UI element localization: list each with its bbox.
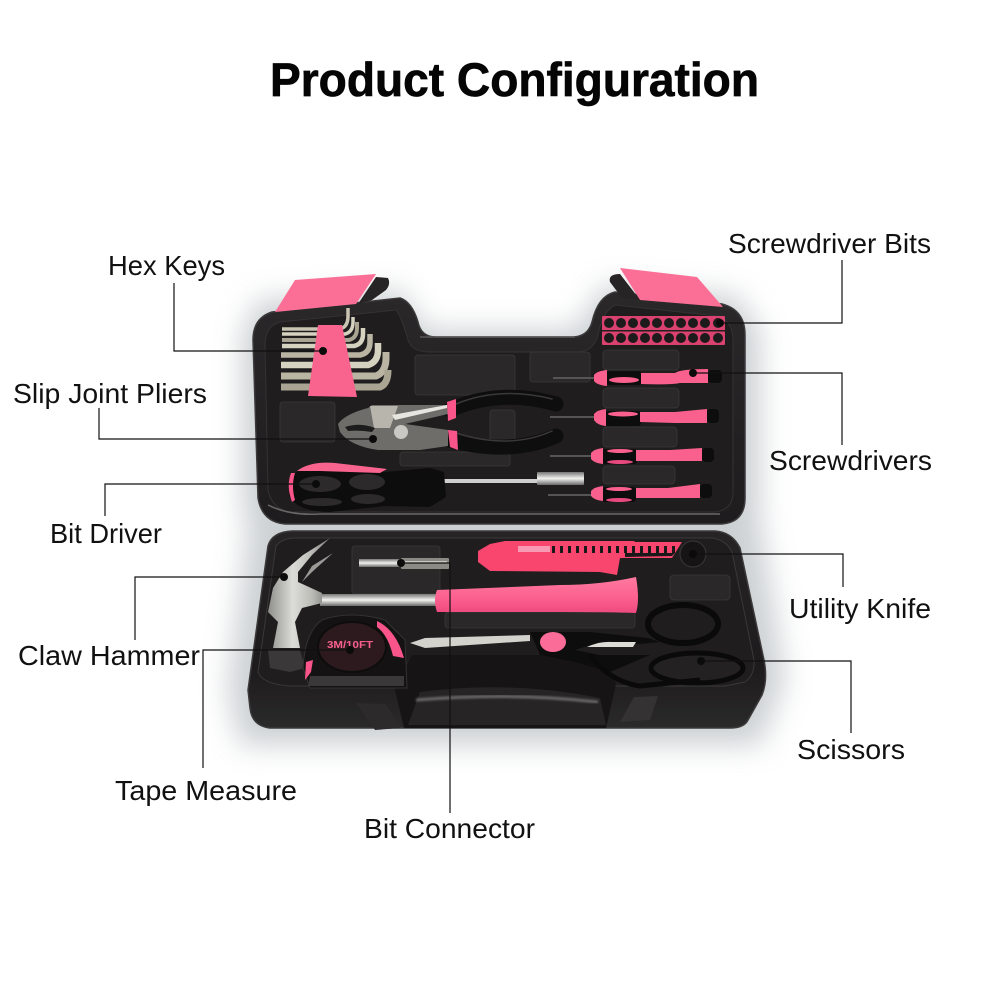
label: Claw Hammer: Claw Hammer	[18, 640, 200, 671]
hex key pink holder	[308, 325, 357, 397]
hinge dark left	[358, 277, 389, 304]
label: Hex Keys: Hex Keys	[108, 250, 225, 281]
carry handle	[395, 655, 616, 728]
bit sockets	[604, 318, 723, 343]
scissor lower handle	[651, 653, 743, 683]
plier jaws	[338, 405, 448, 450]
label: Utility Knife: Utility Knife	[789, 593, 931, 624]
claw hammer	[268, 538, 638, 672]
label: Bit Driver: Bit Driver	[50, 518, 162, 549]
bit set	[602, 316, 725, 345]
pink corner clip right	[620, 268, 723, 307]
upper case tray	[253, 292, 745, 524]
case shadow	[228, 285, 785, 745]
hammer shaft	[320, 594, 436, 606]
lower case tray	[248, 531, 766, 730]
label: Screwdriver Bits: Screwdriver Bits	[728, 228, 931, 259]
scissor pivot	[540, 632, 566, 652]
knife hole	[680, 541, 706, 567]
knife blade teeth	[552, 546, 675, 557]
plier handles	[450, 394, 556, 447]
hammer pink grip	[435, 577, 638, 613]
bit driver shaft	[443, 479, 538, 483]
hex keys	[281, 308, 388, 397]
scissors	[410, 605, 743, 686]
screwdriver 2	[550, 409, 719, 426]
leader lines	[99, 260, 851, 813]
bit driver socket	[537, 472, 584, 485]
utility knife	[478, 541, 706, 575]
bit connector	[359, 558, 449, 569]
pink corner clip left	[275, 274, 376, 312]
bit driver handle	[289, 466, 446, 512]
tray moulded recesses	[352, 546, 730, 628]
latch right	[620, 696, 658, 722]
label: Slip Joint Pliers: Slip Joint Pliers	[13, 378, 207, 409]
tape size text: 3M/10FT	[327, 639, 374, 651]
grip texture	[299, 474, 385, 506]
label: Scissors: Scissors	[797, 734, 905, 765]
scissor blade	[410, 635, 530, 648]
plier pink collars	[447, 399, 456, 421]
scissor upper handle	[648, 605, 718, 643]
bit driver	[289, 463, 584, 512]
latch left	[356, 703, 400, 730]
hinge dark right	[610, 274, 640, 300]
scissor serrated blade	[587, 642, 636, 647]
hammer poll base	[268, 650, 305, 672]
scissor arms	[530, 632, 660, 672]
tray moulded recesses	[280, 350, 679, 484]
hammer head	[268, 538, 330, 648]
leader dots	[280, 319, 724, 665]
toolbox	[228, 268, 785, 745]
screwdriver 3	[550, 448, 714, 464]
slip joint pliers	[338, 394, 556, 450]
title: Product Configuration	[270, 53, 759, 106]
tape measure	[303, 615, 407, 688]
label: Tape Measure: Tape Measure	[115, 775, 297, 806]
screwdriver 1	[553, 369, 722, 386]
screwdrivers	[548, 369, 722, 502]
label: Screwdrivers: Screwdrivers	[769, 445, 932, 476]
tape label	[318, 622, 386, 672]
screwdriver 4	[548, 484, 712, 502]
label: Bit Connector: Bit Connector	[364, 813, 535, 844]
